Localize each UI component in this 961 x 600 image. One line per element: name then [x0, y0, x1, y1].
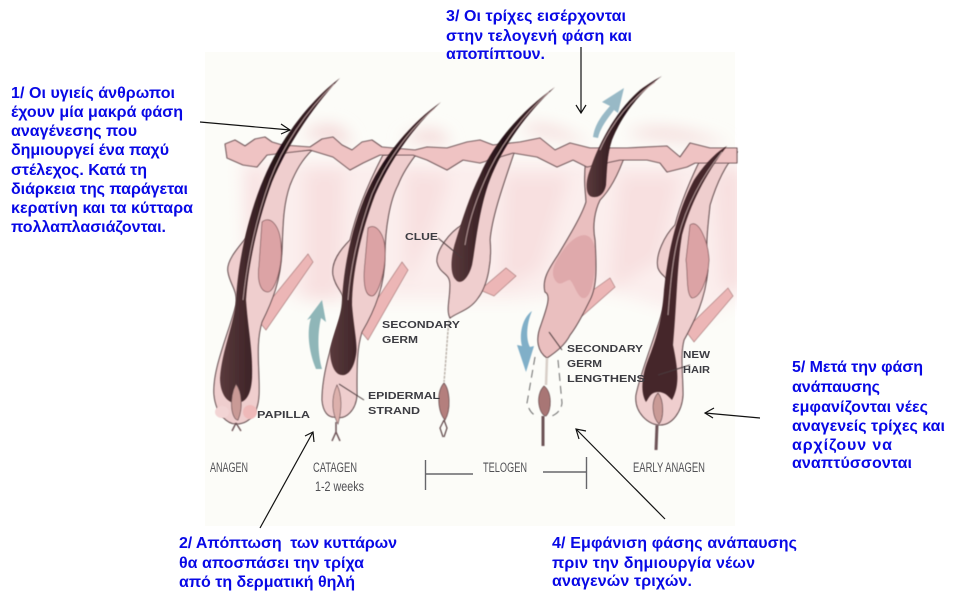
germ strand: [546, 358, 547, 385]
callout 1 text: πολλαπλασιάζονται.: [11, 219, 166, 236]
follicle 2: catagen sheath: [322, 152, 418, 418]
callout 1 text: αναγένεσης που: [11, 123, 137, 140]
label: secondary germ lengthens: [567, 343, 645, 385]
callout 2 text: από τη δερματική θηλή: [179, 574, 355, 591]
sebaceous gland: [258, 220, 281, 292]
callout 1 text: διάρκεια της παράγεται: [11, 181, 188, 198]
caption: catagen: CATAGEN: [313, 460, 357, 475]
label: new hair: HAIR: [683, 364, 710, 376]
label: epidermal strand: STRAND: [368, 405, 420, 417]
label: secondary germ lengthens: LENGTHENS: [567, 373, 645, 385]
callout 5 text: [792, 359, 945, 472]
callout 2 text: 2/ Απόπτωση των κυττάρων: [179, 535, 397, 552]
hair 3: telogen club hair: [438, 87, 555, 437]
arrow 1: [200, 122, 290, 134]
secondary germ strand: [444, 320, 449, 382]
callout 1 text: δημιουργεί ένα παχύ: [11, 142, 169, 159]
label: club: CLUE: [405, 231, 438, 243]
arrow: telogen hair upward: [593, 88, 624, 138]
callout 5 text: εμφανίζονται νέες: [792, 399, 928, 416]
callout 1 text: κερατίνη και τα κύτταρα: [11, 200, 193, 217]
callout 1 text: 1/ Οι υγιείς άνθρωποι: [11, 85, 175, 102]
caption: catagen: [313, 460, 364, 494]
callout 2 text: θα αποσπάσει την τρίχα: [179, 555, 364, 572]
callout 5 text: ανάπαυσης: [792, 379, 880, 396]
follicle 5: early anagen sheath: [636, 150, 737, 425]
label: secondary germ lengthens: GERM: [567, 358, 602, 370]
caption: early anagen: EARLY ANAGEN: [633, 460, 705, 475]
hair 2: catagen shaft and club: [330, 102, 441, 441]
hair 4: shedding club hair: [527, 76, 662, 446]
callout 4 text: αναγενών τριχών.: [552, 573, 692, 590]
label: epidermal strand: [368, 390, 441, 417]
callout 1 text: [11, 85, 193, 236]
epidermal strand: [333, 385, 341, 424]
arrow: secondary germ downward: [517, 311, 534, 372]
callout 1 text: στέλεχος. Κατά τη: [11, 162, 147, 179]
callout 3 text: στην τελογενή φάση και: [446, 28, 632, 45]
caption: anagen: ANAGEN: [210, 460, 248, 475]
caption: telogen: TELOGEN: [483, 460, 527, 475]
callout 5 text: αναγενείς τρίχες και: [792, 418, 945, 435]
epidermis layer: [225, 137, 737, 172]
callout 5 text: 5/ Μετά την φάση: [792, 359, 923, 376]
callout 4 text: [552, 535, 797, 590]
arrow: catagen upward: [307, 300, 326, 369]
callout 3 text: αποπίπτουν.: [446, 46, 545, 63]
label: secondary germ lengthens: SECONDARY: [567, 343, 643, 355]
panel: hair follicle diagram: [210, 75, 739, 491]
arrow 4: [576, 429, 665, 519]
outer root sheath: [214, 150, 312, 424]
callout 2 text: [179, 535, 397, 591]
callout 4 text: πριν την δημιουργία νέων: [552, 555, 755, 572]
callout 5 text: αναπτύσσονται: [792, 455, 912, 472]
callout 1 text: έχουν μία μακρά φάση: [11, 104, 183, 121]
dermis tissue: [240, 125, 745, 320]
muscle: [256, 254, 313, 330]
follicle 1: anagen sheath: [214, 150, 313, 424]
arrow 2: [260, 432, 314, 528]
callout 3 text: 3/ Οι τρίχες εισέρχονται: [446, 8, 626, 25]
label: papilla: PAPILLA: [257, 409, 310, 421]
diagram background: [205, 52, 735, 526]
label: secondary germ: GERM: [382, 334, 418, 346]
callout 3 text: [446, 8, 632, 63]
label: new hair: NEW: [683, 349, 710, 361]
label: secondary germ: [382, 319, 460, 346]
arrow 5: [705, 408, 760, 418]
label: secondary germ: SECONDARY: [382, 319, 460, 331]
papilla: [232, 384, 241, 420]
callout 4 text: 4/ Εμφάνιση φάσης ανάπαυσης: [552, 535, 797, 552]
follicle 4: telogen sheath: [538, 155, 625, 358]
follicle 3: telogen sheath: [437, 150, 516, 318]
label: epidermal strand: EPIDERMAL: [368, 390, 441, 402]
dashed outline: [527, 357, 562, 416]
telogen bracket: [425, 457, 586, 490]
arrow 3: [576, 47, 586, 113]
caption: catagen: 1-2 weeks: [315, 479, 364, 494]
hair 5: new hair: [642, 146, 727, 450]
callout 5 text: αρχίζουν να: [792, 437, 892, 454]
label: new hair: [683, 349, 710, 376]
hair 1: anagen shaft and bulb: [215, 78, 340, 431]
